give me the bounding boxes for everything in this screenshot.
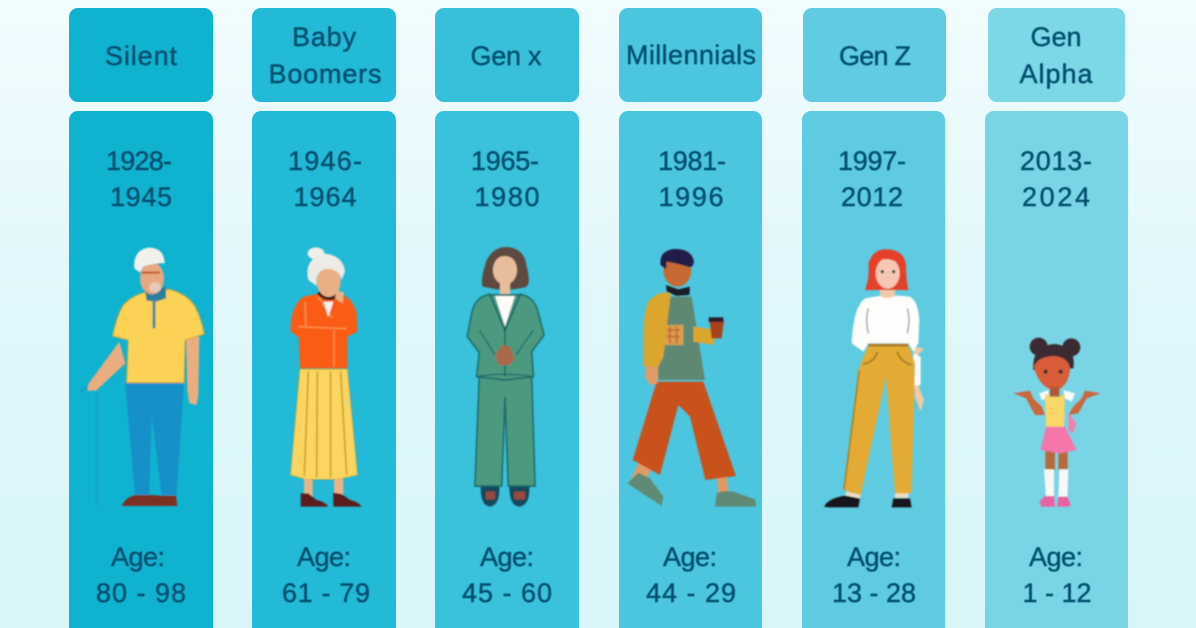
panel: Gen Alpha details	[985, 111, 1128, 628]
panel: Millennials details: 1996	[658, 182, 724, 212]
column: Gen x	[435, 8, 579, 628]
panel: Gen Z details: 13 - 28	[832, 578, 916, 608]
panel: Gen Alpha details: 2024	[1022, 182, 1090, 212]
figure: young woman with red hair	[824, 249, 924, 507]
panel: Gen Alpha details: 1 - 12	[1022, 578, 1092, 608]
panel: Silent details: 1945	[110, 182, 172, 212]
panel: Gen x details: 45 - 60	[462, 578, 552, 608]
header: Baby Boomers	[252, 8, 396, 102]
header: Baby Boomers: Boomers	[268, 59, 382, 89]
panel: Silent details: Age:	[111, 542, 165, 572]
panel: Millennials details	[619, 111, 762, 628]
column: Millennials	[619, 8, 762, 628]
panel: Gen Z details: Age:	[847, 542, 901, 572]
panel: Gen x details	[435, 111, 579, 628]
header: Gen Alpha: Gen	[1030, 22, 1082, 52]
panel: Silent details	[69, 111, 213, 628]
panel: Gen Z details	[802, 111, 945, 628]
header: Gen Z	[803, 8, 946, 102]
panel: Silent details: 1928-	[106, 146, 172, 176]
column: Baby Boomers	[252, 8, 396, 628]
panel: Baby Boomers details: 61 - 79	[282, 578, 370, 608]
panel: Gen Z details: 2012	[841, 182, 903, 212]
panel: Millennials details: Age:	[663, 542, 717, 572]
header: Gen Alpha: Alpha	[1020, 59, 1093, 89]
panel: Gen Z details: 1997-	[838, 146, 906, 176]
column: Gen Z	[802, 8, 946, 628]
header: Millennials: Millennials	[626, 40, 756, 70]
column: Silent	[69, 8, 213, 628]
header: Gen Alpha	[988, 8, 1125, 102]
header: Gen x	[435, 8, 579, 102]
panel: Baby Boomers details	[252, 111, 396, 628]
header: Gen x: Gen x	[470, 41, 542, 71]
header: Silent: Silent	[105, 41, 177, 71]
figure: woman in green suit	[467, 247, 544, 507]
panel: Baby Boomers details: 1946-	[288, 146, 362, 176]
panel: Baby Boomers details: Age:	[297, 542, 351, 572]
panel: Gen x details: Age:	[480, 542, 534, 572]
panel: Gen x details: 1965-	[471, 146, 539, 176]
figure: young man walking with coffee	[627, 249, 756, 507]
header: Baby Boomers: Baby	[292, 22, 356, 52]
figure: elderly man with cane	[81, 248, 204, 506]
panel: Gen Alpha details: Age:	[1029, 542, 1083, 572]
figure: elderly woman in skirt	[291, 247, 362, 507]
panel: Gen Alpha details: 2013-	[1020, 146, 1092, 176]
panel: Millennials details: 44 - 29	[646, 578, 736, 608]
panel: Baby Boomers details: 1964	[294, 182, 356, 212]
header: Millennials	[619, 8, 762, 102]
header: Silent	[69, 8, 213, 102]
panel: Silent details: 80 - 98	[96, 578, 186, 608]
panel: Gen x details: 1980	[474, 182, 540, 212]
panel: Millennials details: 1981-	[658, 146, 726, 176]
column: Gen Alpha	[985, 8, 1128, 628]
header: Gen Z: Gen Z	[839, 41, 911, 71]
figure: little girl shrugging	[1013, 338, 1101, 507]
